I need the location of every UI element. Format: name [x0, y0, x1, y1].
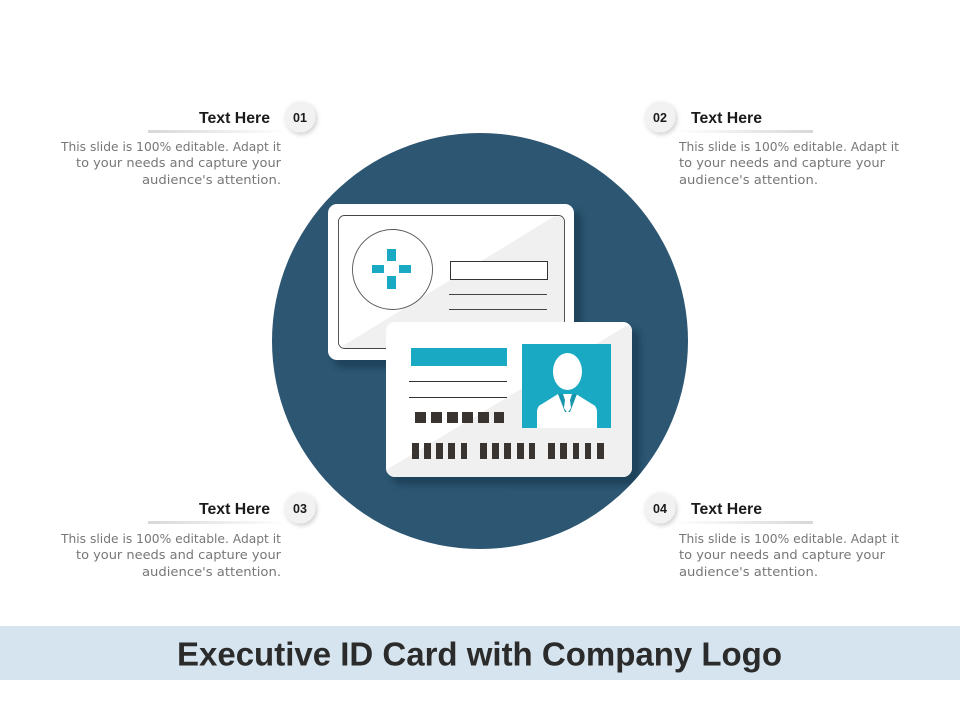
title band — [0, 626, 960, 680]
heading 03: Text Here — [199, 501, 270, 518]
square code row — [415, 412, 504, 423]
callout 04 — [644, 492, 899, 579]
card: front of ID card — [386, 322, 640, 485]
detail lines — [409, 381, 507, 398]
number badge 01 — [284, 102, 316, 132]
title: Executive ID Card with Company Logo — [177, 636, 782, 672]
body text 02 — [678, 140, 899, 187]
company logo — [352, 230, 432, 310]
heading 04: Text Here — [691, 501, 762, 518]
photo: executive silhouette — [522, 344, 611, 428]
number badge 03 — [284, 492, 316, 524]
number badge 01: 01 — [293, 111, 307, 125]
body text 01: This slide is 100% editable. Adapt it — [60, 140, 281, 154]
number badge 04 — [644, 492, 676, 524]
body text 02: to your needs and capture your — [679, 156, 885, 170]
number badge 02: 02 — [653, 111, 667, 125]
number badge 03: 03 — [293, 502, 307, 516]
body text 01 — [60, 140, 281, 187]
card: back of ID card — [328, 204, 582, 368]
name box and lines — [449, 262, 548, 310]
callout 03 — [60, 492, 316, 579]
heading 01: Text Here — [199, 110, 270, 127]
body text 03: This slide is 100% editable. Adapt it — [60, 532, 281, 546]
panel: central circle — [272, 133, 688, 549]
callout 02 — [644, 102, 899, 187]
body text 01: to your needs and capture your — [76, 156, 281, 170]
body text 03: audience's attention. — [142, 565, 281, 579]
body text 04: audience's attention. — [679, 565, 818, 579]
body text 03 — [60, 532, 281, 579]
body text 04: to your needs and capture your — [679, 548, 885, 562]
heading 02: Text Here — [691, 110, 762, 127]
body text 04: This slide is 100% editable. Adapt it — [678, 532, 899, 546]
number badge 02 — [644, 102, 676, 132]
number badge 04: 04 — [653, 502, 667, 516]
barcode — [412, 443, 604, 459]
body text 03: to your needs and capture your — [76, 548, 281, 562]
body text 04 — [678, 532, 899, 579]
body text 02: audience's attention. — [679, 173, 818, 187]
body text 02: This slide is 100% editable. Adapt it — [678, 140, 899, 154]
callout 01 — [60, 102, 316, 187]
name bar — [411, 348, 507, 366]
body text 01: audience's attention. — [142, 173, 281, 187]
